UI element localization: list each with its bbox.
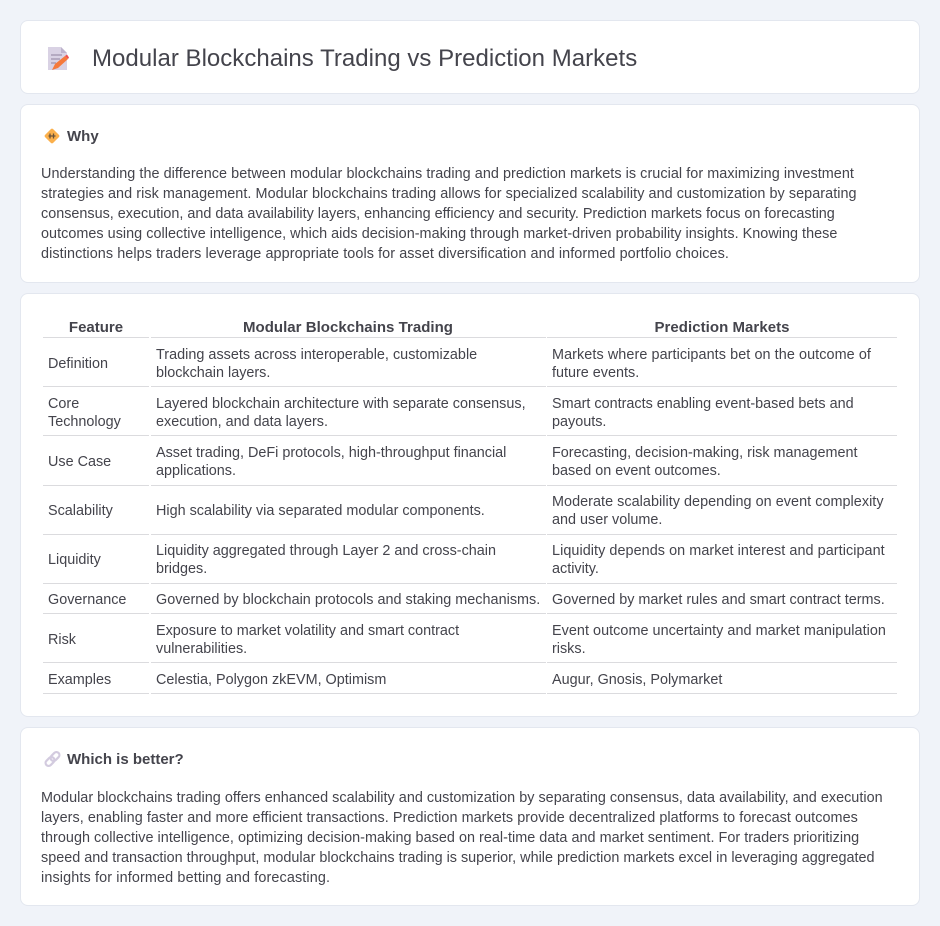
row: scalability: Scalability: [48, 503, 113, 519]
row: examples: Celestia, Polygon zkEVM, Optimism: [156, 672, 386, 688]
text block: which is better paragraph: layers, enabling faster and more efficient transactions. Prediction markets provide decentralized platforms to forecast outcomes: [41, 810, 858, 826]
row: definition: future events.: [552, 365, 639, 381]
text block: which is better paragraph: [41, 790, 883, 886]
row: liquidity: Liquidity: [48, 552, 101, 568]
table header: Modular Blockchains Trading: [243, 319, 453, 336]
row: liquidity: [48, 543, 885, 577]
text block: which is better paragraph: Modular blockchains trading offers enhanced scalability and customization by separating consensus, data availability, and execution: [41, 790, 883, 806]
row: definition: Trading assets across interoperable, customizable: [156, 347, 477, 363]
row: risk: Exposure to market volatility and smart contract: [156, 623, 459, 639]
row: liquidity: activity.: [552, 561, 599, 577]
row: liquidity: bridges.: [156, 561, 207, 577]
row: use case: applications.: [156, 463, 236, 479]
row: core technology: Smart contracts enabling event-based bets and: [552, 396, 854, 412]
row: definition: blockchain layers.: [156, 365, 270, 381]
icon: memo with pencil: [48, 47, 69, 70]
row: use case: Asset trading, DeFi protocols, high-throughput financial: [156, 445, 506, 461]
row: core technology: [48, 396, 854, 430]
row: core technology: Technology: [48, 414, 121, 430]
icon: warning diamond: [44, 128, 60, 144]
table header: [69, 319, 790, 336]
row: risk: Event outcome uncertainty and market manipulation: [552, 623, 886, 639]
row: use case: Forecasting, decision-making, risk management: [552, 445, 858, 461]
panel: which is better: [20, 727, 920, 906]
row: governance: Governance: [48, 592, 126, 608]
row: definition: Markets where participants bet on the outcome of: [552, 347, 871, 363]
row: scalability: and user volume.: [552, 512, 662, 528]
text block: why paragraph: Understanding the difference between modular blockchains trading and prediction markets is crucial for maximizing investment: [41, 166, 854, 182]
table header: Feature: [69, 319, 123, 336]
row: governance: [48, 592, 885, 608]
row: definition: Definition: [48, 356, 108, 372]
row: use case: [48, 445, 858, 479]
row: examples: Augur, Gnosis, Polymarket: [552, 672, 722, 688]
panel: comparison table: [20, 293, 920, 717]
title: Modular Blockchains Trading vs Prediction Markets: [92, 45, 637, 72]
icon: chain link: [44, 751, 60, 767]
row: definition: [48, 347, 871, 381]
row: risk: risks.: [552, 641, 586, 657]
row: liquidity: Liquidity depends on market interest and participant: [552, 543, 885, 559]
text block: why paragraph: distinctions helps traders leverage appropriate tools for asset diversification and informed portfolio choices.: [41, 246, 729, 262]
panel: why: [20, 104, 920, 283]
heading: which is better: Which is better?: [67, 751, 184, 768]
text block: which is better paragraph: speed and transaction throughput, modular blockchains trading is superior, while prediction markets excel in leveraging aggregated: [41, 850, 875, 866]
row: core technology: Core: [48, 396, 79, 412]
row: risk: Risk: [48, 632, 76, 648]
text block: which is better paragraph: through collective intelligence, optimizing decision-making based on real-time data and market sentiment. For traders prioritizing: [41, 830, 859, 846]
row: risk: vulnerabilities.: [156, 641, 247, 657]
row: scalability: Moderate scalability depending on event complexity: [552, 494, 884, 510]
row: scalability: [48, 494, 884, 528]
heading: why: Why: [67, 128, 99, 145]
text block: why paragraph: [41, 166, 857, 262]
row: risk: [48, 623, 886, 657]
row: governance: Governed by blockchain protocols and staking mechanisms.: [156, 592, 540, 608]
row: liquidity: Liquidity aggregated through Layer 2 and cross-chain: [156, 543, 496, 559]
row: use case: based on event outcomes.: [552, 463, 721, 479]
row: governance: Governed by market rules and smart contract terms.: [552, 592, 885, 608]
row: core technology: payouts.: [552, 414, 606, 430]
row: examples: Examples: [48, 672, 111, 688]
row: examples: [48, 672, 722, 688]
text block: why paragraph: outcomes using collective intelligence, which aids decision-making through market-driven probability insights. Knowing these: [41, 226, 837, 242]
table header: Prediction Markets: [654, 319, 790, 336]
text block: why paragraph: consensus, execution, and data availability layers, enhancing efficiency and security. Prediction markets focus on forecasting: [41, 206, 835, 222]
row: use case: Use Case: [48, 454, 111, 470]
row: core technology: Layered blockchain architecture with separate consensus,: [156, 396, 526, 412]
row: core technology: execution, and data layers.: [156, 414, 328, 430]
text block: why paragraph: strategies and risk management. Modular blockchains trading allows for specialized scalability and customization by separating: [41, 186, 857, 202]
panel: title header: [20, 20, 920, 94]
row: scalability: High scalability via separated modular components.: [156, 503, 485, 519]
text block: which is better paragraph: insights for informed betting and forecasting.: [41, 870, 330, 886]
